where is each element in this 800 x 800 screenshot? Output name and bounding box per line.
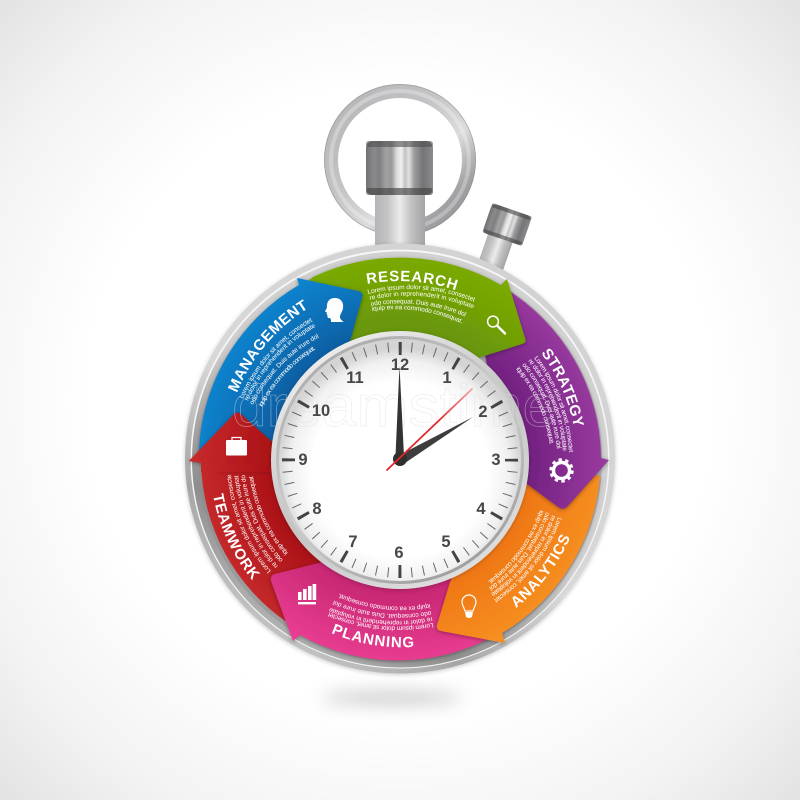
clock numerals: 5 [441, 533, 451, 551]
clock numerals: 4 [476, 500, 486, 518]
text: strategy body: iquip ex ea commodo consequat. [516, 366, 554, 444]
text: research body [368, 284, 476, 324]
icon: briefcase [226, 438, 247, 456]
watermark: dreamstime [232, 374, 557, 439]
text: analytics body: Lorem ipsum dolor sit amet, consectet [494, 518, 562, 602]
text: strategy body: Lorem ipsum dolor sit amet, consectet [534, 356, 574, 452]
title: research: RESEARCH [366, 270, 458, 290]
stopwatch case [185, 244, 615, 674]
panel: teamwork (body) [189, 450, 322, 622]
side pusher [469, 203, 532, 285]
text: teamwork body: odo consequat. Duis aute irure dol [240, 475, 282, 562]
clock numerals [298, 356, 501, 562]
clock numerals: 10 [312, 402, 330, 420]
text: planning body: iquip ex ea commodo consequat. [339, 594, 430, 610]
text: planning body: re dolor in reprehenderit in voluptate [329, 608, 432, 626]
icon: magnifier [488, 316, 505, 334]
clock numerals: 6 [394, 544, 404, 562]
icon: gear [551, 460, 572, 481]
text: management body: odo consequat. Duis aute irure dol [250, 334, 319, 404]
icon: bar chart [298, 584, 316, 604]
clock bezel [271, 331, 529, 589]
clock numerals: 12 [391, 356, 409, 374]
text: research body: iquip ex ea commodo consequat. [372, 305, 462, 324]
title: teamwork: TEAMWORK [214, 493, 260, 580]
text: strategy body: odo consequat. Duis aute irure dol [522, 364, 562, 448]
text: strategy body: re dolor in reprehenderit in voluptate [528, 359, 567, 451]
clock numerals: 7 [348, 533, 358, 551]
text: management body: iquip ex ea commodo consequat. [258, 346, 316, 407]
text: planning body: Lorem ipsum dolor sit amet, consectet [328, 612, 434, 632]
text: analytics body: odo consequat. Duis aute irure dol [489, 512, 549, 591]
text: teamwork body: iquip ex ea commodo consequat. [248, 476, 288, 556]
title: management: MANAGEMENT [228, 299, 306, 392]
clock numerals: 9 [298, 451, 308, 469]
text: planning body: odo consequat. Duis aute irure dol [332, 600, 432, 618]
text: research body: Lorem ipsum dolor sit amet, consectet [368, 284, 476, 302]
minute ticks [287, 347, 513, 573]
panel: planning [268, 562, 490, 664]
text: management body: Lorem ipsum dolor sit amet, consectet [239, 318, 312, 398]
main crown [366, 141, 433, 248]
icon: head silhouette [325, 298, 344, 322]
minute hand [396, 366, 404, 456]
text: research body: re dolor in reprehenderit in voluptate [370, 291, 474, 308]
hour ticks [288, 348, 512, 572]
text: analytics body: iquip ex ea commodo consequat. [488, 510, 544, 584]
clock numerals: 11 [346, 369, 364, 387]
text: planning body [328, 594, 434, 632]
stopwatch ring [324, 84, 476, 236]
panel: management [197, 277, 364, 474]
clock face [279, 339, 521, 581]
text: teamwork body [227, 474, 288, 574]
text: analytics body: re dolor in reprehenderit in voluptate [492, 515, 555, 596]
text: management body: re dolor in reprehenderit in voluptate [245, 324, 315, 401]
panel: research [308, 256, 528, 360]
clock numerals: 2 [478, 403, 488, 421]
ground shadow [320, 693, 464, 703]
clock numerals: 3 [491, 451, 501, 469]
title: strategy: STRATEGY [542, 348, 584, 425]
clock numerals: 1 [442, 369, 452, 387]
hub [393, 452, 407, 466]
text: teamwork body: Lorem ipsum dolor sit amet, consectet [227, 474, 271, 574]
icon: light bulb [462, 595, 476, 618]
text: research body: odo consequat. Duis aute irure dol [370, 300, 466, 316]
clock [232, 331, 557, 589]
clock numerals: 8 [312, 500, 322, 518]
title: analytics: ANALYTICS [512, 534, 570, 608]
second hand [387, 389, 472, 470]
panel: analytics [434, 474, 602, 646]
text: teamwork body: re dolor in reprehenderit in voluptate [234, 476, 278, 568]
panel: strategy [483, 290, 610, 512]
panel: teamwork arrow head [189, 412, 291, 472]
hour hand [398, 417, 473, 464]
title: planning: PLANNING [332, 624, 414, 648]
